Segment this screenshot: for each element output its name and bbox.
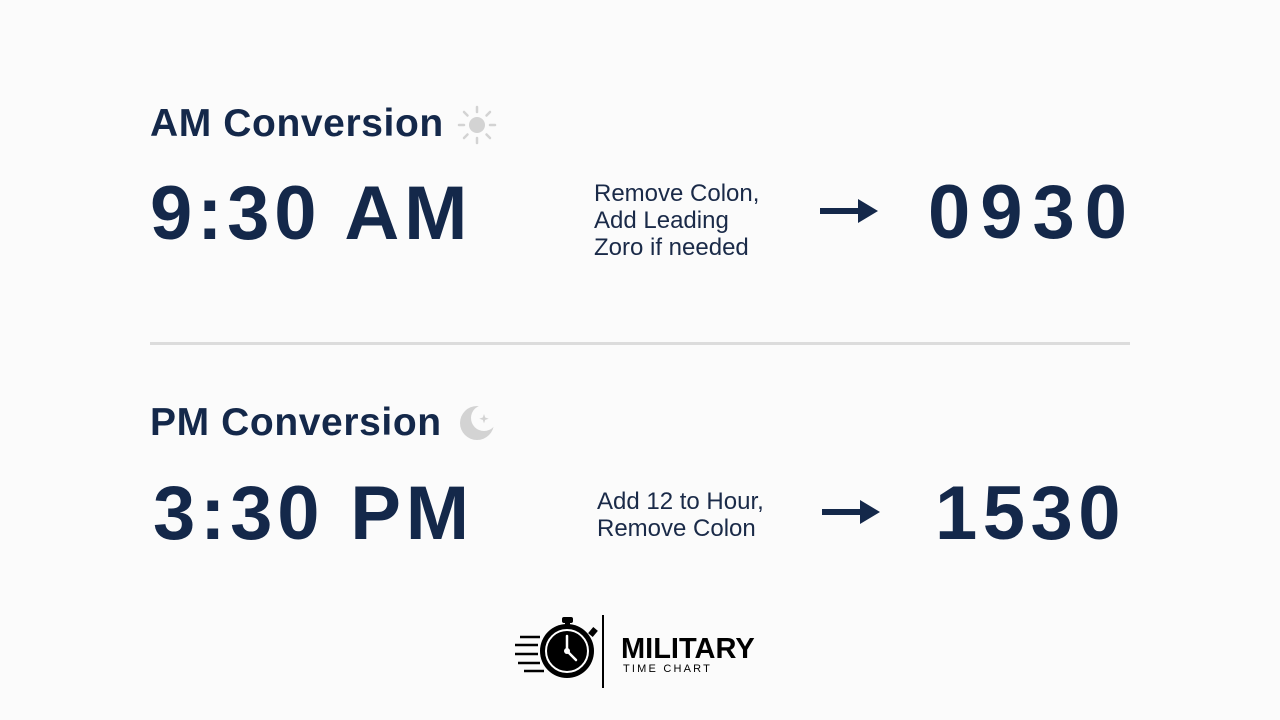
logo [515,615,755,688]
AM time: 9:30 AM [150,171,472,256]
PM rule text [597,488,764,542]
icon: moon [460,406,494,440]
AM rule text: Remove Colon, [594,180,759,207]
AM rule text: Zoro if needed [594,234,749,261]
PM time: 3:30 PM [153,471,474,556]
icon: stopwatch [515,617,598,678]
PM result: 1530 [935,471,1126,556]
tagline: TIME CHART [623,663,712,675]
title: PM Conversion: PM Conversion [150,401,442,444]
arrow: AM [820,199,878,223]
PM rule text: Add 12 to Hour, [597,488,764,515]
icon: sun [458,106,496,144]
title: AM Conversion: AM Conversion [150,102,444,145]
divider [150,342,1130,345]
divider line [602,615,604,688]
AM rule text [594,180,759,261]
AM result: 0930 [928,170,1137,255]
AM rule text: Add Leading [594,207,729,234]
PM rule text: Remove Colon [597,515,756,542]
arrow: PM [822,500,880,524]
brand name: MILITARY [621,633,755,665]
